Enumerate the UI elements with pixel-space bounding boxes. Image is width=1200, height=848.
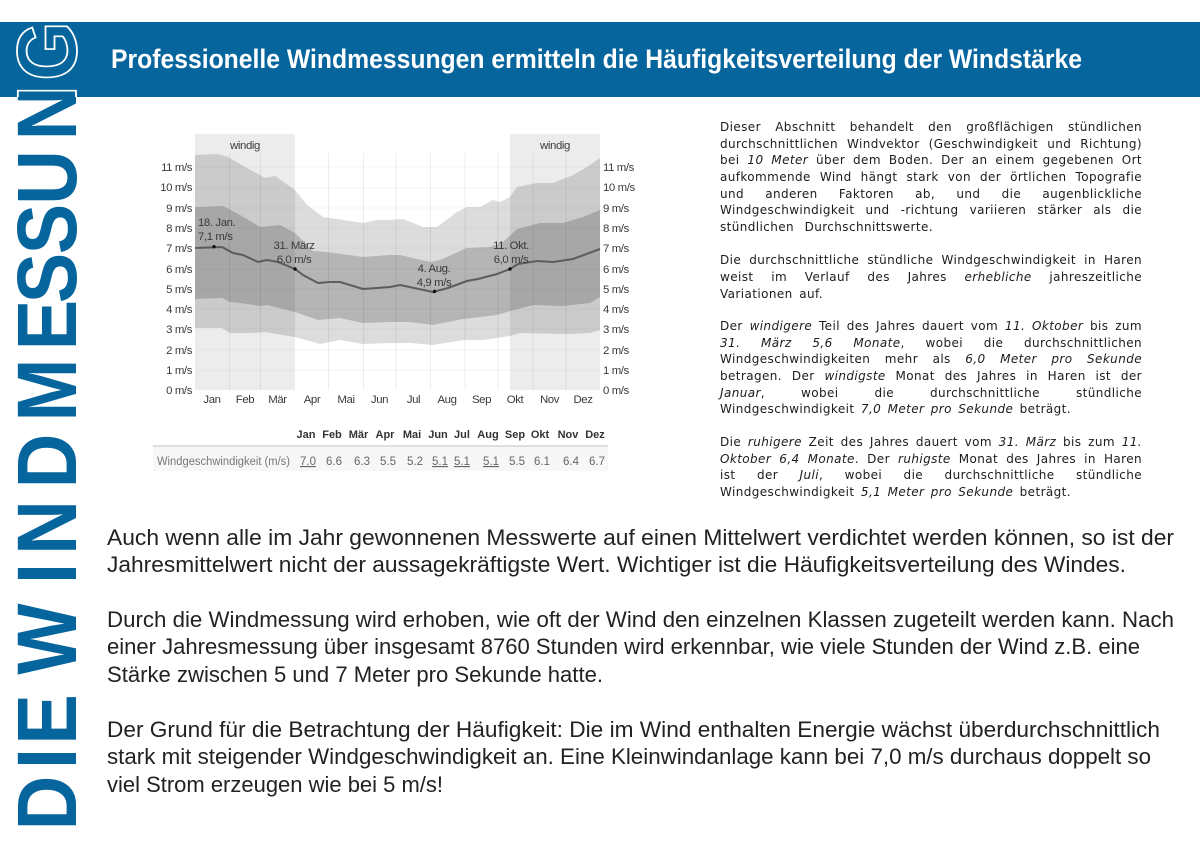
annotation: 4. Aug. [417, 263, 452, 289]
table header months: Jul [454, 429, 470, 441]
right y axis: 2 m/s [603, 345, 630, 357]
side text column: Windgeschwindigkeiten mehr als 6,0 Meter pro Sekunde [720, 352, 1142, 366]
table values: 5.2 [407, 456, 423, 468]
table header months [297, 429, 605, 441]
side text column: aufkommende Wind hängt stark von der örtlichen Topografie [720, 170, 1142, 184]
left y axis: 8 m/s [166, 223, 193, 235]
table row label: Windgeschwindigkeit (m/s) [157, 456, 290, 468]
side text column: weist im Verlauf des Jahres erhebliche jahreszeitliche [720, 270, 1142, 284]
right y axis: 9 m/s [603, 203, 630, 215]
annotation: 11. Okt.: 6,0 m/s [494, 254, 529, 266]
paragraph: wind classes: Stärke zwischen 5 und 7 Meter pro Sekunde hatte. [107, 662, 603, 687]
annotation: 31. März [273, 240, 315, 266]
month axis: Aug [437, 394, 457, 406]
header band [0, 22, 1200, 97]
side text column: 31. März 5,6 Monate, wobei die durchschnittlichen [720, 336, 1142, 350]
right y axis: 0 m/s [603, 385, 630, 397]
table header months: Jun [428, 429, 448, 441]
month axis: Okt [507, 394, 524, 406]
month axis: Nov [540, 394, 560, 406]
paragraph: calmer period [720, 435, 1142, 499]
vertical heading [16, 26, 78, 826]
table header months: Apr [376, 429, 395, 441]
month axis: Apr [304, 394, 321, 406]
annotation: 18. Jan. [198, 217, 236, 243]
table values [300, 456, 605, 468]
paragraph: section description [720, 120, 1142, 234]
median wind speed line [195, 247, 600, 292]
side text column: und anderen Faktoren ab, und die augenblickliche [720, 187, 1142, 201]
side text column: Variationen auf. [720, 287, 823, 301]
paragraph: energy and frequency: viel Strom erzeugen wie bei 5 m/s! [107, 772, 443, 797]
month axis: Feb [236, 394, 254, 406]
right y axis: 10 m/s [603, 182, 635, 194]
table header rule [153, 445, 608, 447]
table header months: Mai [403, 429, 421, 441]
table values: 6.7 [589, 456, 605, 468]
paragraph: wind classes: Durch die Windmessung wird erhoben, wie oft der Wind den einzelnen Klassen zugeteilt werden kann. Nach [107, 607, 1174, 632]
windig label left: windig [229, 140, 260, 152]
side text column: Dieser Abschnitt behandelt den großflächigen stündlichen [720, 120, 1142, 134]
windy season shading: January to March [195, 134, 295, 390]
side text column: Januar, wobei die durchschnittliche stündliche [720, 386, 1142, 400]
vertical heading: DIE WINDMESSUNG [0, 22, 94, 830]
paragraph: energy and frequency: Der Grund für die Betrachtung der Häufigkeit: Die im Wind enthalten Energie wächst überdurchschnittlich [107, 717, 1160, 742]
right y axis: 4 m/s [603, 304, 630, 316]
outer wind band [195, 154, 600, 345]
annotation: 4. Aug.: 4,9 m/s [417, 277, 452, 289]
left y axis: 0 m/s [166, 385, 193, 397]
paragraph: energy and frequency [107, 717, 1160, 797]
table values: 5.1 [454, 456, 470, 468]
table values: 5.5 [509, 456, 525, 468]
month axis: Sep [472, 394, 491, 406]
side text column: stündlichen Durchschnittswerte. [720, 220, 933, 234]
month axis: Mai [337, 394, 355, 406]
left y axis [160, 162, 193, 397]
left y axis: 6 m/s [166, 264, 193, 276]
right y axis: 8 m/s [603, 223, 630, 235]
table header months: Dez [585, 429, 605, 441]
left y axis: 5 m/s [166, 284, 193, 296]
table header months: Nov [558, 429, 579, 441]
left y axis: 7 m/s [166, 243, 193, 255]
left y axis: 1 m/s [166, 365, 193, 377]
paragraph: energy and frequency: stark mit steigender Windgeschwindigkeit an. Eine Kleinwindanlage kann bei 7,0 m/s durchaus doppelt so [107, 744, 1151, 769]
left y axis: 3 m/s [166, 324, 193, 336]
side text column: ist der Juli, wobei die durchschnittliche stündliche [720, 468, 1142, 482]
side text column: Die ruhigere Zeit des Jahres dauert vom 31. März bis zum 11. [720, 435, 1142, 449]
monthly wind speed table [153, 429, 608, 471]
side text column: Windgeschwindigkeit und -richtung variieren stärker als die [720, 203, 1142, 217]
table values: 6.6 [326, 456, 342, 468]
table values: 5.1 [432, 456, 448, 468]
table values: 5.5 [380, 456, 396, 468]
left y axis: 10 m/s [160, 182, 193, 194]
month axis: Jun [371, 394, 388, 406]
right y axis [603, 162, 635, 397]
wind speed chart [160, 134, 635, 406]
table values: 6.3 [354, 456, 370, 468]
month axis [203, 394, 593, 406]
side text column: bei 10 Meter über dem Boden. Der an einem gegebenen Ort [720, 153, 1142, 167]
table values: 6.1 [534, 456, 550, 468]
table row background [153, 447, 608, 471]
paragraph: annual mean: Jahresmittelwert nicht der aussagekräftigste Wert. Wichtiger ist die Häufigkeitsverteilung des Windes. [107, 552, 1126, 577]
month axis: Jul [407, 394, 420, 406]
windig label right: windig [539, 140, 570, 152]
paragraph: annual mean: Auch wenn alle im Jahr gewonnenen Messwerte auf einen Mittelwert verdichtet werden können, so ist der [107, 525, 1175, 550]
side text column: durchschnittlichen Windvektor (Geschwindigkeit und Richtung) [720, 137, 1142, 151]
side text column [718, 120, 1142, 499]
windy season shading: October to December [510, 134, 600, 390]
table values: 6.4 [563, 456, 580, 468]
side text column: Oktober 6,4 Monate. Der ruhigste Monat des Jahres in Haren [720, 452, 1142, 466]
side text column: Der windigere Teil des Jahres dauert vom 11. Oktober bis zum [720, 319, 1142, 333]
right y axis: 6 m/s [603, 264, 630, 276]
paragraph: annual mean [107, 525, 1175, 577]
left y axis: 9 m/s [166, 203, 193, 215]
annotation: 4. Aug.: 4. Aug. [418, 263, 451, 275]
paragraph: wind classes: einer Jahresmessung über insgesamt 8760 Stunden wird erkennbar, wie viele Stunden der Wind z.B. eine [107, 634, 1140, 659]
right y axis: 11 m/s [603, 162, 635, 174]
left y axis: 11 m/s [161, 162, 193, 174]
left y axis: 2 m/s [166, 345, 193, 357]
table header months: Mär [349, 429, 369, 441]
month axis: Jan [203, 394, 221, 406]
annotation: 18. Jan.: 7,1 m/s [198, 231, 233, 243]
main body text [107, 525, 1175, 797]
side text column: Windgeschwindigkeit 5,1 Meter pro Sekunde beträgt. [720, 485, 1071, 499]
table header months: Okt [531, 429, 550, 441]
vertical heading: DIE WINDMESSUNG [0, 22, 94, 830]
paragraph: wind classes [107, 607, 1174, 687]
right y axis: 5 m/s [603, 284, 630, 296]
annotation: 11. Okt. [493, 240, 529, 266]
annotation: 31. März: 31. März [273, 240, 315, 252]
right y axis: 3 m/s [603, 324, 630, 336]
title: Professionelle Windmessungen ermitteln die Häufigkeitsverteilung der Windstärke [111, 44, 1082, 74]
table header months: Aug [477, 429, 499, 441]
table values: 5.1 [483, 456, 499, 468]
month axis: Dez [573, 394, 593, 406]
data markers [212, 245, 512, 293]
paragraph: windier period [718, 319, 1142, 416]
table header months: Jan [297, 429, 316, 441]
annotation: 31. März: 6,0 m/s [277, 254, 312, 266]
side text column: Windgeschwindigkeit 7,0 Meter pro Sekunde beträgt. [720, 402, 1071, 416]
paragraph: seasonal variation [720, 253, 1142, 301]
side text column: Die durchschnittliche stündliche Windgeschwindigkeit in Haren [720, 253, 1142, 267]
side text column: betragen. Der windigste Monat des Jahres in Haren ist der [720, 369, 1142, 383]
table values: 7.0 [300, 456, 316, 468]
right y axis: 7 m/s [603, 243, 630, 255]
table header months: Feb [322, 429, 342, 441]
annotation: 18. Jan.: 18. Jan. [198, 217, 236, 229]
right y axis: 1 m/s [603, 365, 630, 377]
table header months: Sep [505, 429, 525, 441]
inner wind band [195, 206, 600, 325]
month axis: Mär [268, 394, 287, 406]
left y axis: 4 m/s [166, 304, 193, 316]
annotation: 11. Okt.: 11. Okt. [493, 240, 529, 252]
